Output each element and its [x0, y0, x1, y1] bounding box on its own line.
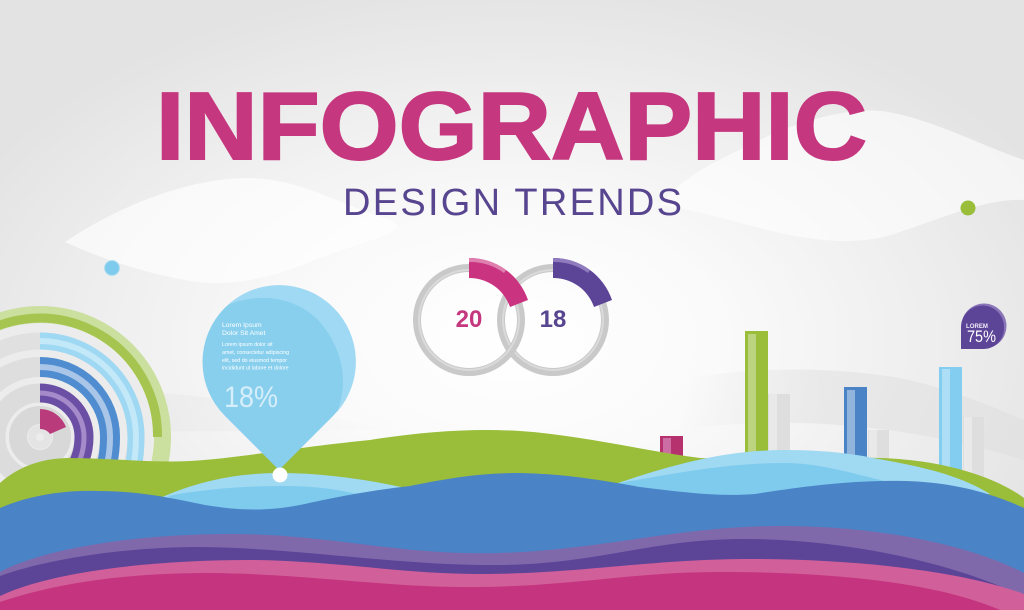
- badge: 75%: 75%: [967, 327, 996, 346]
- wave: light blue right: [615, 450, 990, 510]
- concentric ring chart: [0, 314, 162, 560]
- donut: 18: 18: [540, 306, 566, 333]
- ring: blue: [40, 367, 110, 480]
- pin: 18% callout: Lorem Ipsum: [222, 322, 262, 329]
- ring: pink: [40, 409, 66, 434]
- bar: light blue: [939, 367, 962, 477]
- donut: 18: [501, 258, 612, 372]
- donut: 20: 20: [456, 306, 482, 333]
- title: INFOGRAPHIC: [156, 73, 867, 180]
- pin: 18% callout: incididunt ut labore et dolore: [222, 366, 289, 372]
- ring: light blue: [40, 341, 136, 490]
- wave: light purple: [0, 526, 1024, 610]
- bar: gray 3: [963, 417, 984, 477]
- badge: 75%: [961, 304, 1006, 349]
- pin: 18% callout: amet, consectetur adipiscing: [222, 350, 289, 356]
- dot: light blue: [104, 260, 120, 276]
- badge: 75%: LOREM: [966, 323, 988, 330]
- ring: green: [0, 314, 162, 560]
- ring: purple: [40, 393, 84, 475]
- subtitle: DESIGN TRENDS: [343, 182, 682, 224]
- wave: light blue left: [160, 473, 415, 530]
- pin: 18% callout: Lorem ipsum dolor sit: [222, 342, 273, 348]
- wave: blue: [0, 473, 1024, 610]
- dot: green: [960, 200, 976, 216]
- bar: gray 1: [768, 394, 790, 464]
- hills: green: [0, 430, 1024, 520]
- pin: 18% callout: elit, sed do eiusmod tempor: [222, 358, 287, 364]
- bar: green: [745, 331, 768, 466]
- wave: pink: [0, 572, 1000, 610]
- pin: 18% callout: 18%: [224, 381, 278, 414]
- wave: light pink: [0, 559, 1024, 610]
- donut: 20: [417, 258, 528, 372]
- bar: pink: [660, 436, 683, 466]
- wave: dark purple: [0, 539, 1024, 610]
- bar: blue: [844, 387, 867, 467]
- pin: 18% callout: Dolor Sit Amet: [222, 330, 266, 337]
- pin: 18% callout: [202, 285, 356, 470]
- bar: gray 2: [868, 430, 889, 470]
- gray rings: [0, 324, 153, 550]
- pin anchor dot: [272, 468, 288, 482]
